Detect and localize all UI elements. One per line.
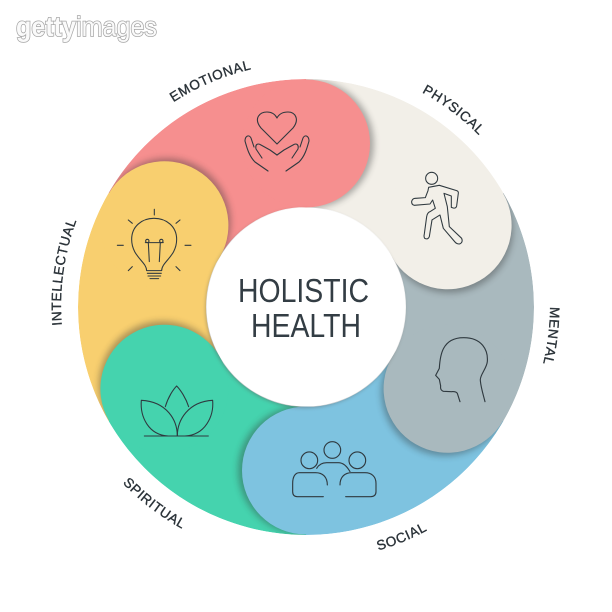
watermark: gettyimages: gettyimages — [16, 11, 157, 42]
band: intellectual — [93, 225, 235, 389]
title: HEALTH — [251, 307, 361, 344]
icon: head profile — [436, 338, 487, 402]
label: spiritual: SPIRITUAL — [124, 478, 182, 529]
cap: intellectual — [108, 154, 234, 263]
icon: heart in hands — [245, 112, 309, 171]
center circle — [206, 208, 406, 408]
band: spiritual — [164, 348, 306, 512]
cap: emotional — [300, 79, 378, 210]
title — [238, 272, 369, 344]
label: emotional: EMOTIONAL — [169, 61, 251, 102]
label: physical: PHYSICAL — [422, 84, 482, 136]
icon: light bulb — [117, 209, 191, 279]
band: emotional — [164, 143, 306, 225]
icon: people group — [293, 442, 376, 497]
band: social — [306, 389, 448, 471]
cap: physical — [390, 193, 516, 296]
cap: mental — [378, 351, 504, 460]
donut wheel — [75, 80, 537, 534]
label: mental: MENTAL — [543, 308, 560, 364]
title: HOLISTIC — [238, 272, 369, 309]
icon: walking person — [412, 172, 462, 244]
band: physical — [306, 102, 448, 266]
cap: social — [234, 404, 314, 535]
band: mental — [377, 225, 519, 389]
label: social: SOCIAL — [377, 524, 427, 550]
cap: spiritual — [95, 318, 223, 421]
label: intellectual: INTELLECTUAL — [51, 220, 76, 325]
icon: lotus — [141, 386, 213, 436]
infographic: holistic health wheel — [16, 15, 560, 550]
